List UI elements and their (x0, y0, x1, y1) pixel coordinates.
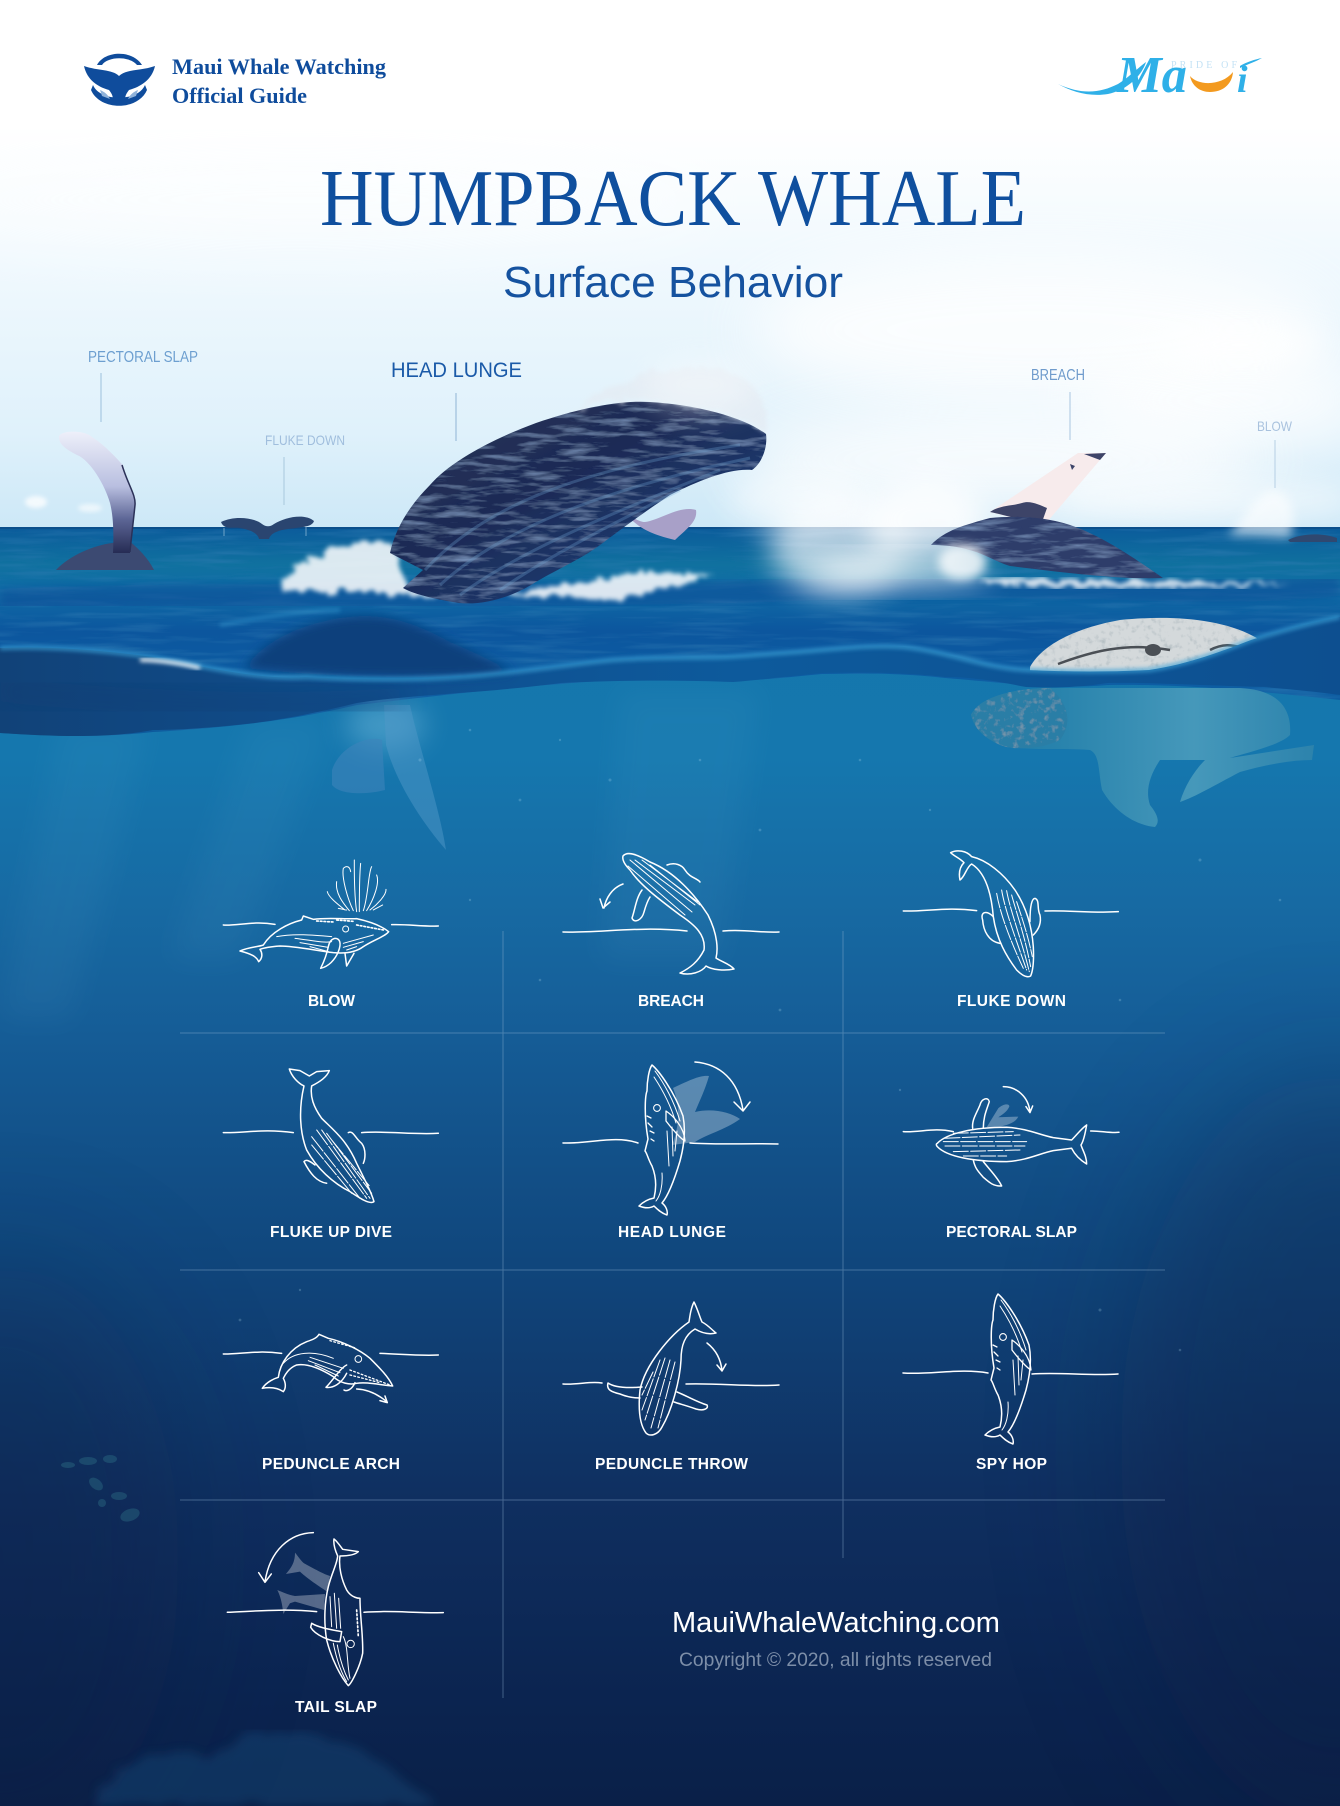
label: pectoral slap (88, 349, 198, 422)
whale outline (639, 1065, 685, 1215)
whale body (390, 402, 766, 603)
logo text (172, 54, 387, 108)
icon: fluke down (903, 851, 1118, 977)
school of fish (61, 1455, 141, 1524)
icon: fluke up dive (223, 1069, 438, 1203)
label: head lunge (391, 358, 522, 441)
front wave of the water surface (0, 610, 1340, 736)
icon: blow (223, 860, 438, 968)
whale back (56, 540, 154, 570)
whale fin (627, 509, 696, 540)
breach fin (990, 453, 1106, 522)
whale: fluke down tail (221, 517, 314, 539)
whale: breach (931, 453, 1163, 580)
icon: pectoral slap (903, 1087, 1119, 1186)
label: pectoral slap: PECTORAL SLAP (946, 1224, 1077, 1241)
logo: Pride of Maui: i (1237, 59, 1248, 101)
label: blow: BLOW (308, 993, 355, 1010)
coral reef at bottom (88, 1730, 440, 1806)
icon: peduncle arch (223, 1334, 438, 1403)
icon: peduncle throw (563, 1302, 779, 1435)
bubbles and particles (239, 729, 1281, 1351)
lower vignette (0, 1070, 1340, 1806)
title: HUMPBACK WHALE (320, 155, 1026, 243)
icon: breach (563, 854, 779, 974)
label: peduncle arch: PEDUNCLE ARCH (262, 1456, 400, 1473)
dark water hump (245, 616, 512, 677)
label: breach: BREACH (1031, 367, 1085, 384)
logo text: Maui Whale Watching (172, 54, 387, 79)
label: head lunge: HEAD LUNGE (618, 1224, 726, 1241)
logo: Maui Whale Watching tail (84, 54, 155, 106)
label: fluke down (265, 432, 345, 505)
breach body (931, 517, 1163, 578)
wave highlights (0, 617, 1340, 679)
ocean surface (0, 527, 1340, 736)
label: tail slap: TAIL SLAP (295, 1699, 377, 1716)
logo: Pride of Maui (1058, 47, 1262, 104)
whale: pectoral slap (56, 432, 154, 570)
website: MauiWhaleWatching.com (672, 1607, 1000, 1639)
icon: head lunge (563, 1062, 778, 1215)
logo: Pride of Maui: PRIDE OF (1171, 60, 1237, 71)
label: fluke up dive: FLUKE UP DIVE (270, 1224, 392, 1241)
label: breach: BREACH (638, 993, 704, 1010)
whale: blow spout (1228, 490, 1337, 542)
whale: spy hop large underwater body (971, 688, 1314, 827)
throat grooves (425, 445, 750, 595)
whale: spy hop large head above water (1030, 618, 1260, 672)
whale: head lunge underwater bubbles and fins (332, 700, 446, 850)
label: blow (1257, 418, 1293, 488)
label: breach (1031, 367, 1085, 440)
label: head lunge: HEAD LUNGE (391, 358, 522, 382)
splash behind head lunge and breach (282, 472, 1290, 600)
spray on head (570, 367, 767, 432)
light rays underwater (0, 690, 760, 1020)
ghost whale tails (277, 1553, 330, 1614)
whale: head lunge (390, 357, 767, 603)
label: fluke down: FLUKE DOWN (265, 432, 345, 448)
label: blow: BLOW (1257, 418, 1293, 434)
copyright: Copyright © 2020, all rights reserved (679, 1649, 992, 1671)
label: pectoral slap: PECTORAL SLAP (88, 349, 198, 366)
label: peduncle throw: PEDUNCLE THROW (595, 1456, 748, 1473)
label: spy hop: SPY HOP (976, 1456, 1047, 1473)
ghost whale shadow (672, 1076, 740, 1145)
logo text: Official Guide (172, 83, 307, 108)
ghost fin (987, 1104, 1018, 1127)
logo: Pride of Maui: Ma (1116, 47, 1187, 104)
icon: spy hop (903, 1294, 1118, 1444)
clouds in the sky (0, 150, 1340, 524)
grid dividers (180, 931, 1165, 1698)
subtitle: Surface Behavior (503, 258, 843, 307)
label: fluke down: FLUKE DOWN (957, 993, 1066, 1010)
pectoral fin (59, 432, 135, 553)
icon: tail slap (227, 1533, 443, 1686)
